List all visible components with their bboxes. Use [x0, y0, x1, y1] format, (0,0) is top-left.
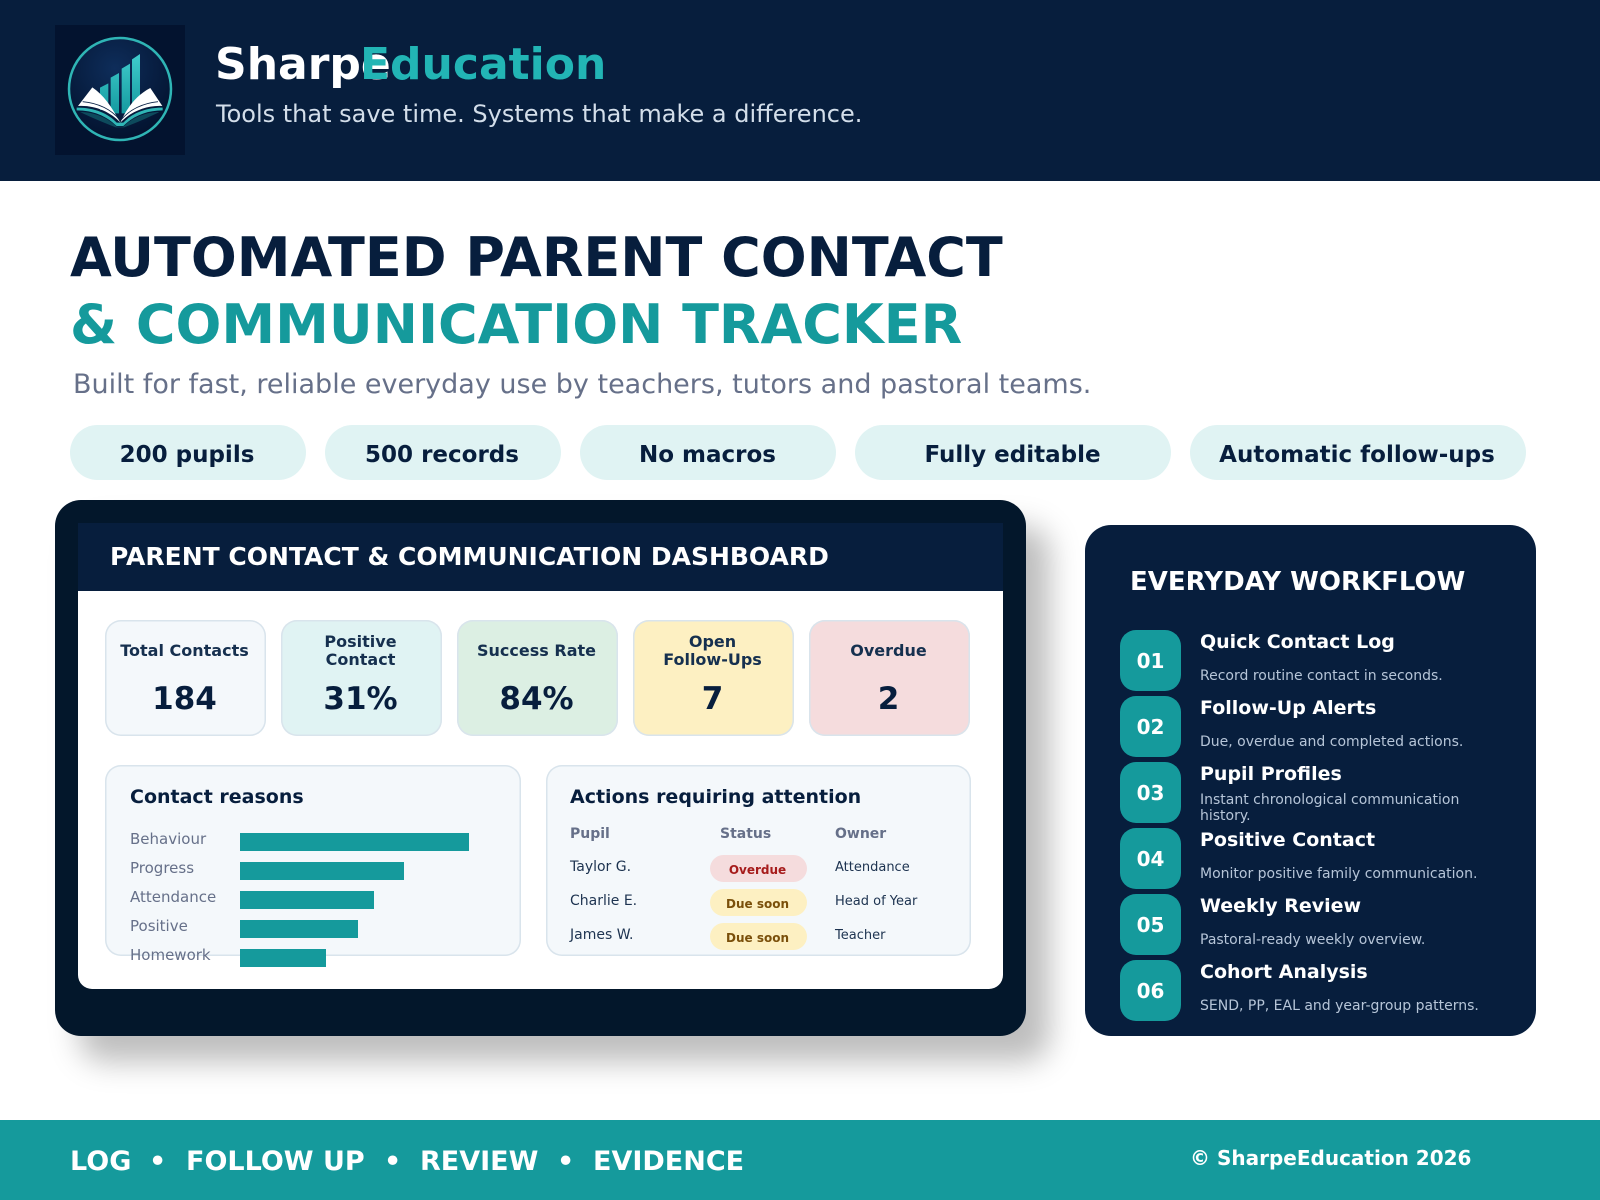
bar: positive	[240, 920, 358, 938]
KPI card: positive contact: Positive	[324, 632, 397, 650]
header band	[0, 0, 1600, 181]
step 06: Cohort Analysis	[1200, 961, 1368, 983]
step 02: Due, overdue and completed actions.	[1200, 734, 1463, 750]
footer process strip	[70, 1146, 744, 1177]
KPI card: success rate: 84%	[499, 681, 574, 717]
step 03: 03	[1137, 781, 1164, 805]
bar label: homework: Homework	[130, 946, 211, 964]
KPI card: total contacts: Total Contacts	[120, 640, 249, 660]
footer process strip: REVIEW	[420, 1146, 538, 1177]
KPI card: overdue: 2	[878, 681, 899, 717]
row 1 status badge: Overdue	[729, 863, 786, 877]
bar label: behaviour: Behaviour	[130, 830, 206, 848]
footer band	[0, 1120, 1600, 1200]
step 05: Pastoral-ready weekly overview.	[1200, 932, 1425, 948]
KPI card: open follow-ups	[633, 620, 794, 736]
footer process strip: FOLLOW UP	[186, 1146, 365, 1177]
table heading: Actions requiring attention	[570, 786, 861, 808]
KPI card: success rate	[457, 620, 618, 736]
row 1 owner: Attendance	[835, 860, 910, 875]
step 04: Monitor positive family communication.	[1200, 866, 1477, 882]
step 04: Positive Contact	[1200, 829, 1375, 851]
row 2 status badge	[710, 889, 807, 916]
KPI card: success rate: Success Rate	[477, 640, 596, 660]
panel: dashboard device frame	[55, 500, 1026, 1036]
bar: progress	[240, 862, 404, 880]
brand name: Sharpe	[215, 39, 391, 90]
row 2 status badge: Due soon	[726, 897, 789, 911]
step 05: 05	[1137, 913, 1164, 937]
tagline: Tools that save time. Systems that make a difference.	[216, 100, 862, 128]
footer process strip: •	[149, 1146, 166, 1177]
brand name: Education	[360, 39, 606, 90]
KPI card: overdue	[809, 620, 970, 736]
step 04	[1120, 828, 1477, 889]
title: AUTOMATED PARENT CONTACT	[70, 226, 1003, 289]
row 2 owner: Head of Year	[835, 894, 917, 909]
pill: 500 records: 500 records	[365, 442, 519, 468]
step 03: Pupil Profiles	[1200, 763, 1342, 785]
title: & COMMUNICATION TRACKER	[70, 293, 962, 356]
step 05	[1120, 894, 1425, 955]
KPI card: open follow-ups: Open	[689, 632, 736, 650]
footer copyright: © SharpeEducation 2026	[1190, 1146, 1471, 1170]
row 3 status badge	[710, 923, 807, 950]
step 02: Follow-Up Alerts	[1200, 697, 1376, 719]
bar: attendance	[240, 891, 374, 909]
footer process strip: •	[557, 1146, 574, 1177]
step 05: Weekly Review	[1200, 895, 1361, 917]
panel: actions requiring attention table	[546, 765, 970, 956]
dashboard screen	[78, 523, 1003, 989]
KPI card: open follow-ups: 7	[702, 681, 723, 717]
row 3 owner: Teacher	[835, 928, 885, 943]
pill: 200 pupils: 200 pupils	[120, 442, 254, 468]
KPI card: total contacts: 184	[152, 681, 217, 717]
bar: homework	[240, 949, 326, 967]
pill: 500 records	[325, 425, 561, 480]
footer process strip: EVIDENCE	[593, 1146, 744, 1177]
KPI card: overdue: Overdue	[850, 640, 927, 660]
panel: everyday workflow	[1085, 525, 1536, 1036]
dashboard heading bar: PARENT CONTACT & COMMUNICATION DASHBOARD	[110, 542, 829, 571]
panel: contact reasons bar chart	[105, 765, 521, 956]
workflow heading: EVERYDAY WORKFLOW	[1130, 567, 1465, 597]
brand name	[215, 39, 606, 90]
feature pills	[70, 425, 1526, 480]
step 03: Instant chronological communication	[1200, 792, 1459, 808]
title	[70, 226, 1003, 356]
KPI card: open follow-ups: Follow-Ups	[663, 650, 762, 668]
KPI card: positive contact	[281, 620, 442, 736]
row 1 pupil: Taylor G.	[570, 859, 631, 875]
bar label: attendance: Attendance	[130, 888, 216, 906]
step 04: 04	[1137, 847, 1164, 871]
bar: behaviour	[240, 833, 469, 851]
step 01: Quick Contact Log	[1200, 631, 1395, 653]
step 06: SEND, PP, EAL and year-group patterns.	[1200, 998, 1479, 1014]
bar label: progress: Progress	[130, 859, 194, 877]
step 06	[1120, 960, 1479, 1021]
step 01: Record routine contact in seconds.	[1200, 668, 1443, 684]
subtitle: Built for fast, reliable everyday use by teachers, tutors and pastoral teams.	[73, 369, 1091, 400]
step 01: 01	[1137, 649, 1164, 673]
row 3 pupil: James W.	[570, 927, 633, 943]
KPI card: positive contact: Contact	[326, 650, 395, 668]
footer process strip: LOG	[70, 1146, 131, 1177]
KPI card: total contacts	[105, 620, 266, 736]
column header: status: Status	[720, 826, 771, 842]
pill: no macros	[580, 425, 836, 480]
step 01	[1120, 630, 1443, 691]
pill: no macros: No macros	[639, 442, 776, 468]
step 02: 02	[1137, 715, 1164, 739]
row 1 status badge	[710, 855, 807, 882]
step 03: history.	[1200, 808, 1251, 824]
footer process strip: •	[384, 1146, 401, 1177]
pill: 200 pupils	[70, 425, 306, 480]
step 02	[1120, 696, 1463, 757]
chart heading: Contact reasons	[130, 786, 304, 808]
row 2 pupil: Charlie E.	[570, 893, 637, 909]
bar label: positive: Positive	[130, 917, 188, 935]
pill: fully editable: Fully editable	[924, 442, 1101, 468]
column header: pupil: Pupil	[570, 826, 610, 842]
pill: automatic follow-ups: Automatic follow-ups	[1219, 442, 1495, 468]
step 03	[1120, 762, 1459, 824]
pill: automatic follow-ups	[1190, 425, 1526, 480]
step 06: 06	[1137, 979, 1164, 1003]
column header: owner: Owner	[835, 826, 886, 842]
icon: SharpeEducation logo, open book with rising bars	[55, 25, 185, 155]
pill: fully editable	[855, 425, 1171, 480]
row 3 status badge: Due soon	[726, 931, 789, 945]
dashboard heading bar	[78, 523, 1003, 591]
KPI card: positive contact: 31%	[323, 681, 398, 717]
